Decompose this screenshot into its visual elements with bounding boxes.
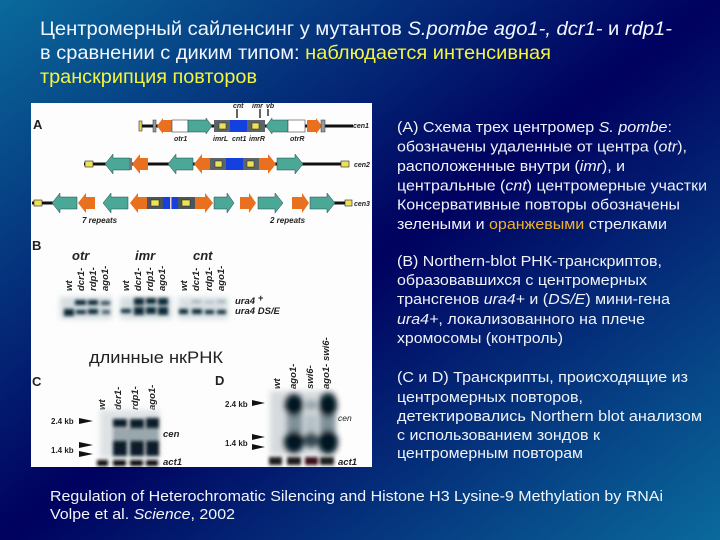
panel D: northern blot: 2.4 kb xyxy=(225,400,248,409)
panel D: northern blot: D xyxy=(215,373,224,388)
centromere scheme cen1: vb xyxy=(266,103,275,110)
centromere scheme cen2: cen2 xyxy=(354,162,370,169)
panel C: northern blot: 2.4 kb xyxy=(51,417,74,426)
title: транскрипция повторов xyxy=(40,66,257,88)
lane labels: wt xyxy=(121,280,132,291)
centromere scheme cen1: cnt1 xyxy=(232,136,246,143)
lane labels xyxy=(64,266,227,291)
panel B: northern blot: B xyxy=(32,238,41,253)
lane labels: ago1- xyxy=(100,266,111,291)
text block: C and D description: (C и D) Транскрипты, происходящие из xyxy=(397,370,688,386)
centromere scheme cen1: imrR xyxy=(249,136,265,143)
label: long ncRNA: длинные нкРНК xyxy=(89,348,223,367)
panel C: northern blot xyxy=(32,374,182,468)
text block: A description: Консервативные повторы обозначены xyxy=(397,198,680,214)
panel D: northern blot xyxy=(215,337,357,468)
lane labels: dcr1- xyxy=(133,268,144,291)
centromere scheme cen3: 7 repeats xyxy=(82,216,118,225)
title: Центромерный сайленсинг у мутантов S.pombe ago1-, dcr1- и rdp1- xyxy=(40,18,673,40)
title xyxy=(40,18,673,88)
text block: B description: ura4+, локализованного на плече xyxy=(397,312,645,328)
panel C: northern blot: dcr1- xyxy=(113,387,124,410)
centromere scheme cen3: cen3 xyxy=(354,201,370,208)
lane labels: rdp1- xyxy=(145,267,156,291)
text block: B description: образовавшихся с центромерных xyxy=(397,273,648,289)
centromere scheme cen2 xyxy=(84,154,370,174)
text block: C and D description: центромерным повторам xyxy=(397,446,583,462)
text block: B description: (B) Northern-blot РНК-транскриптов, xyxy=(397,254,662,270)
text block: A description: центральные ( cnt) центромерные участки xyxy=(397,178,707,194)
centromere scheme cen1: otrR xyxy=(290,136,304,143)
blot bands: ura4 DS/E xyxy=(235,306,281,317)
panel B: northern blot: otr xyxy=(72,248,90,263)
text block: A description: (A) Схема трех центромер S. pombe : xyxy=(397,120,672,136)
centromere scheme cen1 xyxy=(139,103,369,143)
footer citation xyxy=(50,488,663,523)
text block: C and D description: детектировались Northern blot анализом xyxy=(397,409,702,425)
panel D: northern blot: 1.4 kb xyxy=(225,439,248,448)
lane labels: rdp1- xyxy=(204,267,215,291)
lane labels: ago1- xyxy=(157,266,168,291)
panel A: centromere schemes: A xyxy=(33,117,43,132)
panel D: northern blot: swi6- xyxy=(305,365,316,389)
panel D: northern blot: act1 xyxy=(338,457,357,468)
text block: A description: расположенные внутри ( imr), и xyxy=(397,159,625,175)
text block: A description xyxy=(397,120,707,233)
centromere scheme cen1: otr1 xyxy=(174,136,187,143)
centromere scheme cen1: cnt xyxy=(233,103,244,110)
footer citation: Regulation of Heterochromatic Silencing and Histone H3 Lysine-9 Methylation by RNAi xyxy=(50,488,663,505)
text block: C and D description: с использованием зондов к xyxy=(397,428,601,444)
centromere scheme cen1: imr xyxy=(252,103,264,110)
text block: C and D description xyxy=(397,370,702,462)
panel D: northern blot: wt xyxy=(272,378,283,389)
centromere scheme cen1: cen1 xyxy=(353,123,369,130)
footer citation: Volpe et al. Science, 2002 xyxy=(50,506,235,523)
panel A: centromere schemes xyxy=(32,103,370,225)
lane labels: dcr1- xyxy=(76,268,87,291)
blot bands: ura4 xyxy=(235,296,255,307)
title: в сравнении с диким типом: наблюдается интенсивная xyxy=(40,42,551,64)
panel D: northern blot: ago1- xyxy=(288,364,299,389)
text block: B description: трансгенов ura4+ и (DS/E) мини-гена xyxy=(397,292,671,308)
blot bands xyxy=(60,293,281,319)
lane labels: dcr1- xyxy=(191,268,202,291)
panel D: northern blot: cen xyxy=(338,413,352,423)
panel: figure xyxy=(31,103,372,468)
blot bands: + xyxy=(258,293,264,304)
lane labels: wt xyxy=(64,280,75,291)
text block: A description: обозначены удаленные от центра ( otr), xyxy=(397,140,687,156)
panel B: northern blot: imr xyxy=(135,248,156,263)
lane labels: rdp1- xyxy=(88,267,99,291)
panel C: northern blot: 1.4 kb xyxy=(51,446,74,455)
panel B: northern blot: cnt xyxy=(193,248,213,263)
centromere scheme cen1: imrL xyxy=(213,136,228,143)
text block: A description: зелеными и оранжевыми стрелками xyxy=(397,217,667,233)
panel C: northern blot: rdp1- xyxy=(130,386,141,410)
centromere scheme cen3: 2 repeats xyxy=(269,216,306,225)
centromere scheme cen3 xyxy=(32,193,370,225)
panel C: northern blot: cen xyxy=(163,429,180,440)
text block: C and D description: центромерных повторов, xyxy=(397,390,583,406)
text block: B description: хромосомы (контроль) xyxy=(397,331,563,347)
panel C: northern blot: act1 xyxy=(163,457,182,468)
panel C: northern blot: C xyxy=(32,374,42,389)
text block: B description xyxy=(397,254,671,347)
panel C: northern blot: wt xyxy=(97,399,108,410)
lane labels: ago1- xyxy=(216,266,227,291)
panel C: northern blot: ago1- xyxy=(147,385,158,410)
lane labels: wt xyxy=(179,280,190,291)
panel D: northern blot: ago1- swi6- xyxy=(321,337,332,389)
panel B: northern blot xyxy=(32,238,281,319)
